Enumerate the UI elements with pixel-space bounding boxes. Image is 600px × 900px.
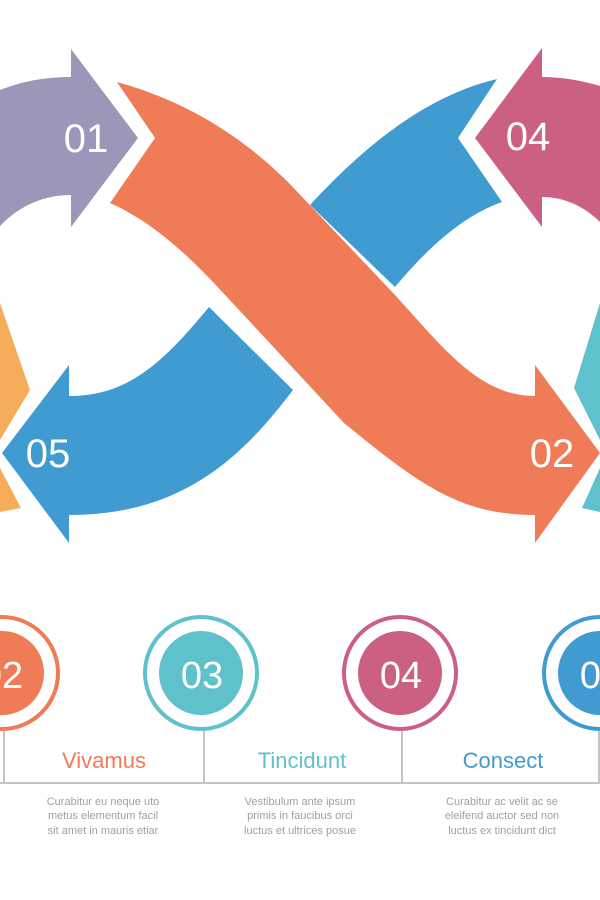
arrow 06 yellow edge bbox=[0, 303, 30, 512]
step descriptions: luctus ex tincidunt dict bbox=[448, 825, 556, 837]
step descriptions: Curabitur ac velit ac se bbox=[446, 796, 558, 808]
step 05 circle bbox=[544, 617, 600, 729]
step 03 circle bbox=[145, 617, 257, 729]
arrow 05 blue: 05 bbox=[26, 432, 70, 476]
step 04 circle bbox=[344, 617, 456, 729]
step titles: Vivamus bbox=[62, 748, 146, 773]
arrow 05 blue bbox=[2, 307, 293, 543]
step descriptions: Curabitur eu neque uto bbox=[47, 796, 159, 808]
arrow 04 pink: 04 bbox=[506, 115, 550, 159]
step descriptions: eleifend auctor sed non bbox=[445, 810, 559, 822]
step descriptions: luctus et ultrices posue bbox=[244, 825, 356, 837]
arrow 02 orange band: 02 bbox=[530, 432, 574, 476]
step 04 circle: 04 bbox=[380, 655, 422, 697]
step titles bbox=[62, 748, 543, 773]
step descriptions: primis in faucibus orci bbox=[247, 810, 353, 822]
step 03 circle: 03 bbox=[181, 655, 223, 697]
timeline lines bbox=[0, 731, 600, 783]
step titles: Consect bbox=[463, 748, 543, 773]
step descriptions: metus elementum facil bbox=[48, 810, 158, 822]
step 02 circle bbox=[0, 617, 58, 729]
step titles: Tincidunt bbox=[258, 748, 346, 773]
step descriptions bbox=[47, 796, 559, 837]
arrow 01 purple bbox=[0, 49, 138, 227]
arrow 04 pink bbox=[475, 48, 600, 227]
arrow 03 teal edge bbox=[574, 303, 600, 512]
arrow 01 purple: 01 bbox=[64, 117, 108, 161]
band: blue upper bbox=[310, 79, 502, 287]
step descriptions: Vestibulum ante ipsum bbox=[245, 796, 355, 808]
step descriptions: sit amet in mauris etiar bbox=[48, 825, 159, 837]
